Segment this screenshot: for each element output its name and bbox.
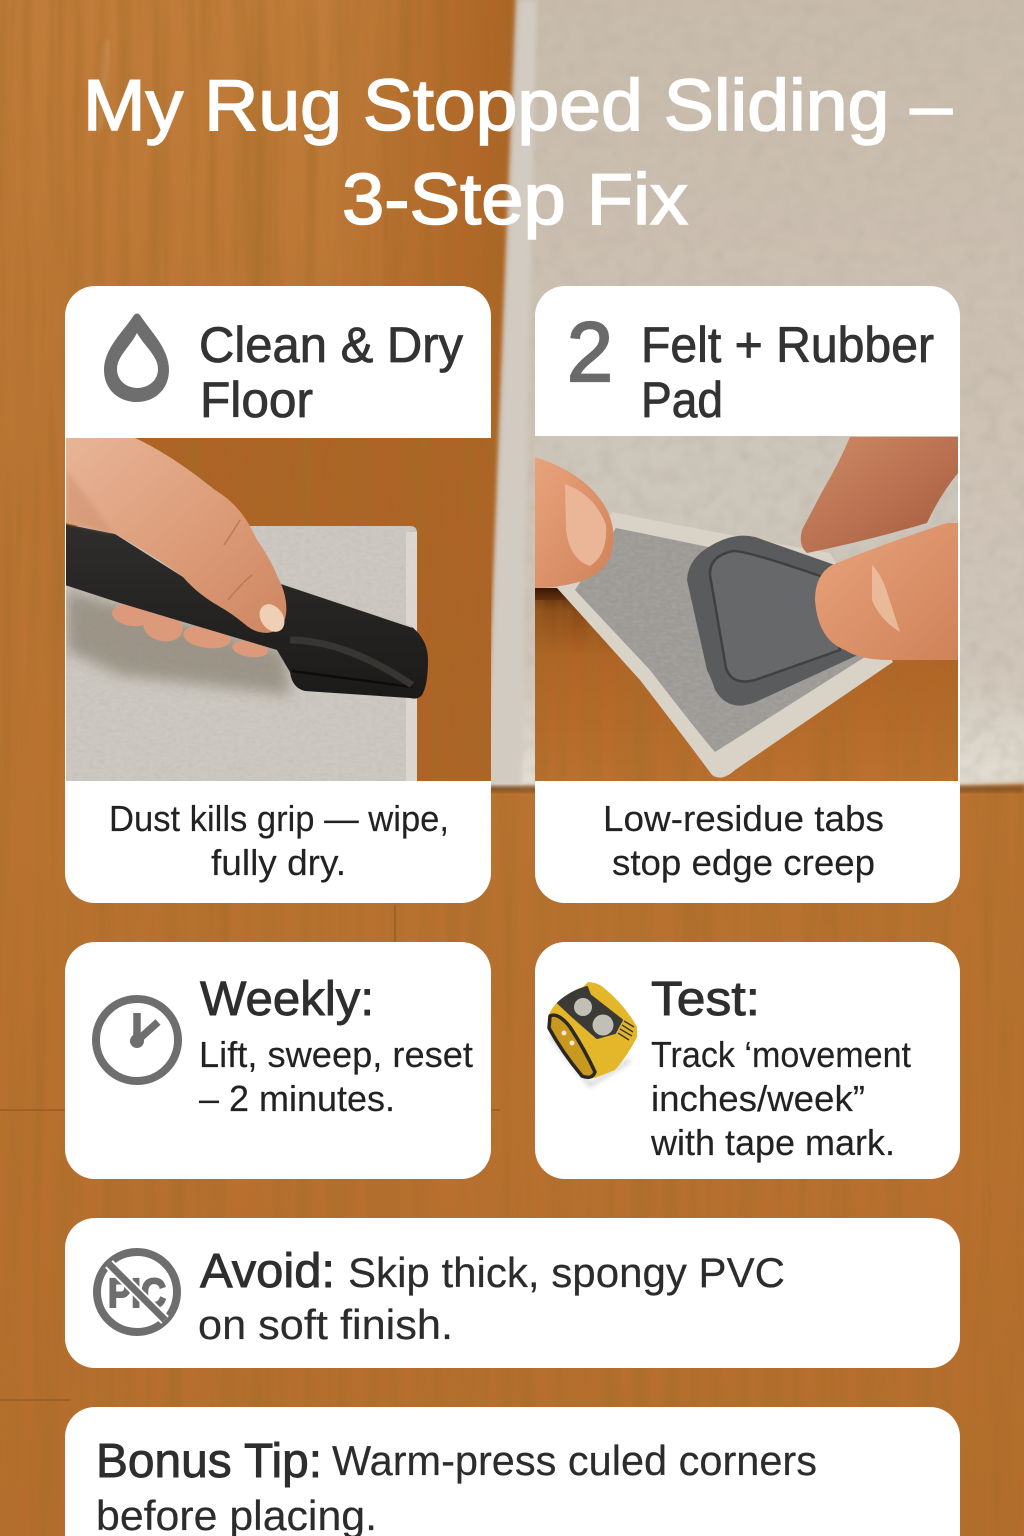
heading: felt and rubber pad [641,317,934,428]
icon: no PVC: PIC [108,1270,166,1316]
text: weekly: Weekly: [200,973,374,1026]
icon: number 2: 2 [567,305,613,399]
hand [66,438,286,633]
caption: dust kills grip: Dust kills grip — wipe, [109,798,449,839]
panel: avoid [65,1218,960,1368]
text: test: Test: [651,973,760,1026]
text: avoid: Skip thick, spongy PVC [348,1249,785,1296]
text: weekly [199,973,473,1119]
text: avoid: on soft finish. [198,1301,453,1348]
heading: clean and dry floor: Clean & Dry [199,317,463,373]
text: test: with tape mark. [650,1122,895,1163]
left finger [535,457,614,588]
text: bonus tip: Bonus Tip: [96,1435,322,1488]
text: weekly: – 2 minutes. [199,1078,395,1119]
caption: low residue tabs: Low-residue tabs [603,798,884,839]
title: My Rug Stopped Sliding – [83,66,953,146]
thumb [815,523,958,660]
text: weekly: Lift, sweep, reset [199,1034,473,1075]
icon: clock [96,999,178,1081]
folded rug corner [557,512,893,778]
photo: hand vacuuming rug corner [65,438,491,781]
text: bonus tip [96,1435,817,1536]
heading: clean and dry floor [199,317,463,428]
heading: clean and dry floor: Floor [200,372,313,428]
text: bonus tip: Warm-press culed corners [332,1437,817,1484]
top right finger [801,437,958,553]
photo: fingers placing pad under rug corner [535,436,958,781]
panel: test [535,942,960,1179]
rubber pad [687,536,858,706]
caption: low residue tabs: stop edge creep [612,842,875,883]
panel: step 1 clean and dry floor [65,286,491,903]
caption: dust kills grip: fully dry. [211,842,346,883]
icon: no PVC [97,1252,177,1332]
title: 3-Step Fix [342,160,688,240]
icon: tape measure [548,982,637,1085]
text: test: Track ‘movement [651,1034,911,1075]
text: test [650,973,911,1163]
text: avoid: Avoid: [200,1245,335,1298]
text: test: inches/week” [651,1078,865,1119]
text: avoid [198,1245,785,1348]
caption: dust kills grip [109,798,449,883]
heading: felt and rubber pad: Pad [641,372,723,428]
heading: felt and rubber pad: Felt + Rubber [641,317,934,373]
panel: step 2 felt and rubber pad [535,286,960,903]
icon: water drop [104,314,169,402]
panel: weekly [65,942,491,1179]
vacuum nozzle [65,524,428,699]
title [83,66,953,240]
fingers under the handle [111,601,269,659]
panel: bonus tip [65,1407,960,1536]
caption: low residue tabs [603,798,884,883]
